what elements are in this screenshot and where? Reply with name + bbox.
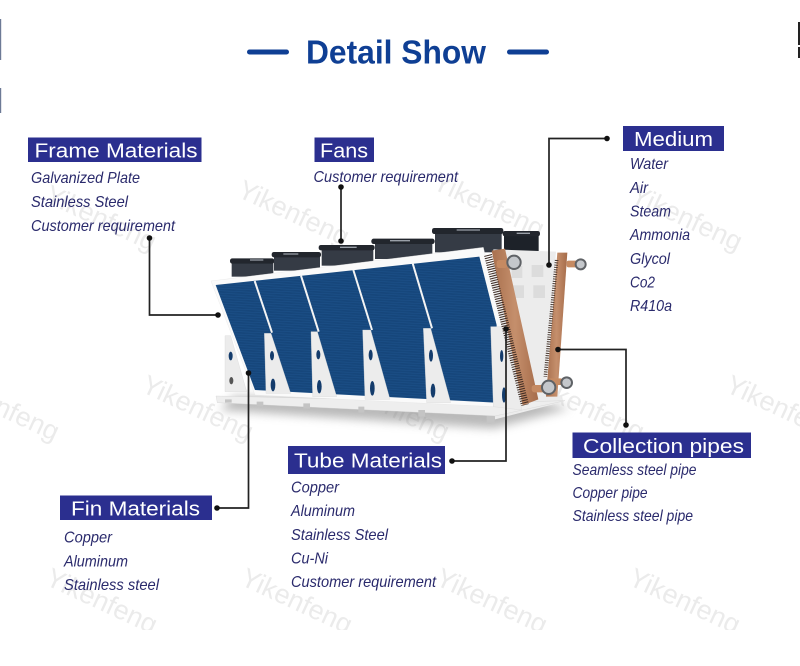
connector: medium <box>546 136 610 268</box>
watermarks: Yikenfeng <box>528 369 649 447</box>
connector: collection pipes <box>555 347 629 428</box>
fans <box>230 228 540 277</box>
connector: fin materials <box>214 370 251 511</box>
panel: fin materials <box>60 496 212 594</box>
panel: frame materials: Frame Materials <box>34 140 198 162</box>
panel: tube materials: Cu-Ni <box>291 550 328 568</box>
connector: tube materials <box>449 326 509 464</box>
panel: collection pipes: Copper pipe <box>572 485 648 502</box>
side plate <box>490 249 564 419</box>
panel: fin materials: Copper <box>64 530 113 546</box>
base rail <box>216 396 565 423</box>
watermarks: Yikenfeng <box>137 369 258 447</box>
pipe flanges <box>507 256 586 394</box>
panel: medium: Glycol <box>630 251 670 268</box>
panel: medium: Ammonia <box>629 227 690 244</box>
panel: collection pipes: Collection pipes <box>583 435 744 458</box>
watermarks: Yikenfeng <box>41 562 162 640</box>
panel: frame materials: Stainless Steel <box>31 194 128 211</box>
panel: tube materials: Aluminum <box>290 503 355 520</box>
connector: fans <box>338 184 344 244</box>
watermarks: Yikenfeng <box>236 562 357 640</box>
panel: fin materials: Aluminum <box>63 554 128 570</box>
title: Detail Show <box>306 34 486 70</box>
panel: collection pipes: Stainless steel pipe <box>572 508 693 525</box>
bracket slots <box>229 350 506 403</box>
edge marks <box>0 19 800 113</box>
panel: medium: Co2 <box>630 274 655 292</box>
dry cooler unit illustration <box>211 228 586 428</box>
mullions <box>255 263 432 333</box>
watermarks: Yikenfeng <box>333 369 454 447</box>
panel: tube materials: Customer requirement <box>291 574 437 591</box>
panel: medium: Air <box>629 180 649 197</box>
title <box>247 34 549 70</box>
panel: collection pipes <box>572 432 751 525</box>
watermarks: Yikenfeng <box>40 179 161 257</box>
panel: medium: Water <box>630 156 669 173</box>
side mounting tabs <box>512 265 545 298</box>
panel: medium: R410a <box>630 298 672 315</box>
watermarks: Yikenfeng <box>626 179 747 257</box>
panel: tube materials: Stainless Steel <box>291 527 388 544</box>
panel: fans: Fans <box>320 140 368 162</box>
frame top band <box>211 247 502 407</box>
left copper header <box>488 249 545 405</box>
panel: frame materials: Customer requirement <box>31 218 176 235</box>
panel: tube materials: Copper <box>291 480 340 496</box>
panel: fans: Customer requirement <box>314 169 459 186</box>
right copper header <box>545 253 578 397</box>
blue fin coil <box>216 257 497 403</box>
watermarks: Yikenfeng <box>428 166 549 244</box>
connector: frame materials <box>147 235 221 318</box>
panel: medium <box>623 126 724 315</box>
panel: tube materials: Tube Materials <box>294 450 442 472</box>
watermarks: Yikenfeng <box>624 562 745 640</box>
panel: medium: Medium <box>634 128 713 151</box>
panel: medium: Steam <box>630 204 671 220</box>
panel: tube materials <box>288 446 445 591</box>
panel: collection pipes: Seamless steel pipe <box>572 462 697 479</box>
panel: fans <box>314 138 459 186</box>
watermarks: Yikenfeng <box>431 562 552 640</box>
watermarks: Yikenfeng <box>233 174 354 252</box>
panel: fin materials: Stainless steel <box>64 577 159 594</box>
ground shadow <box>220 397 570 428</box>
panel: frame materials: Galvanized Plate <box>31 170 140 187</box>
watermarks <box>0 166 800 640</box>
support brackets <box>225 327 522 410</box>
panel: fin materials: Fin Materials <box>71 498 200 520</box>
panel: frame materials <box>28 138 202 235</box>
